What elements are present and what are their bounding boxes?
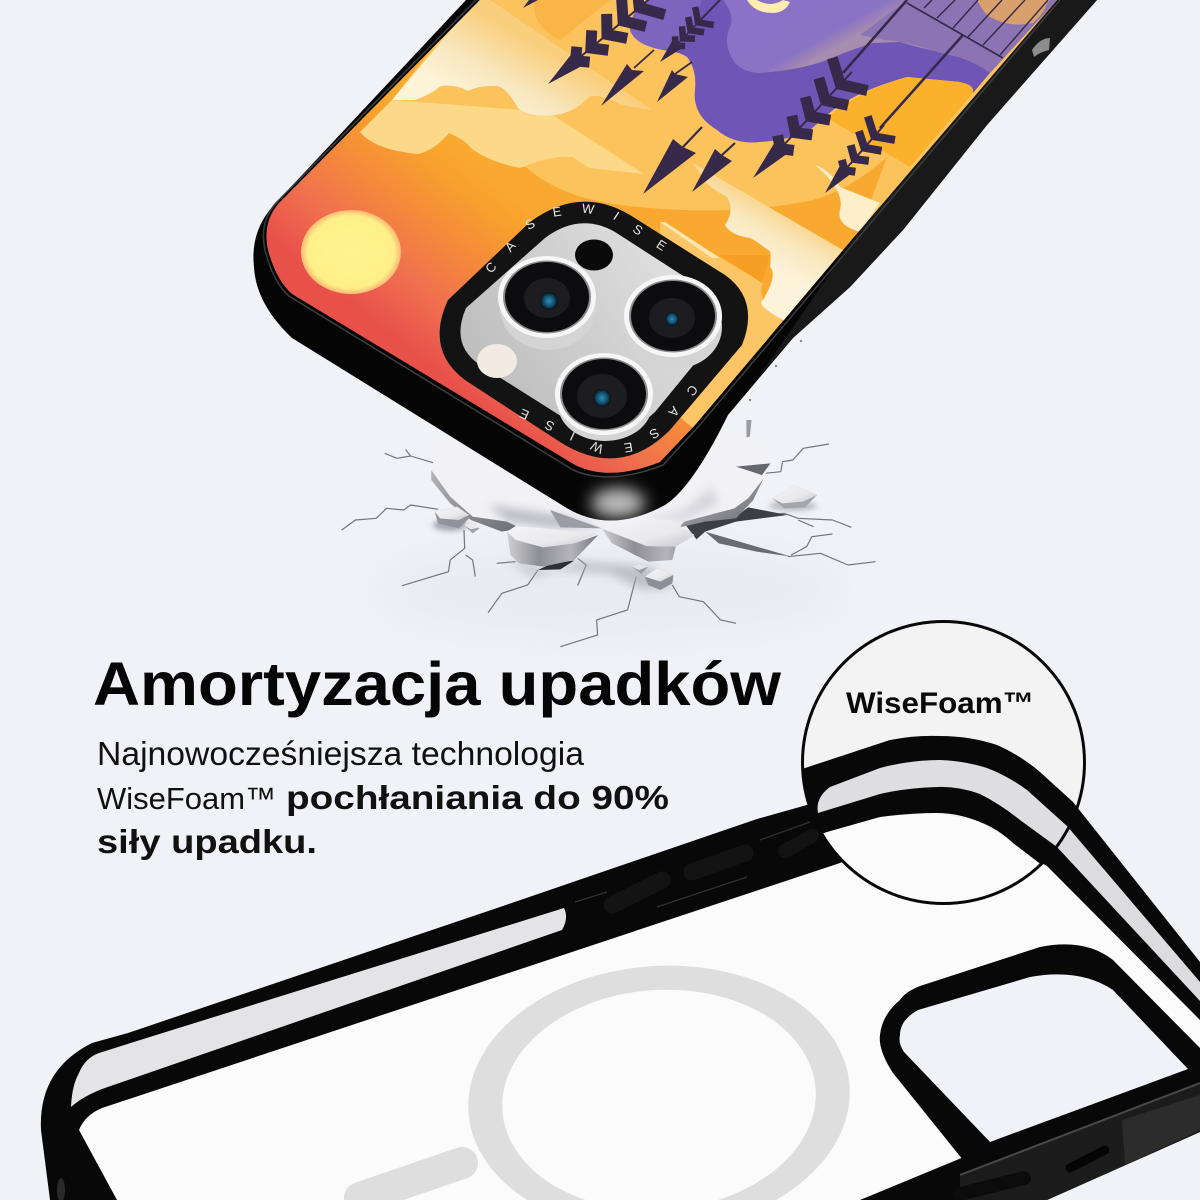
- orange wedge: [720, 255, 770, 283]
- shard B top: [602, 519, 695, 547]
- small shard 1: [435, 507, 469, 528]
- magnified frame: [804, 736, 1076, 864]
- title: Amortyzacja upadków: [93, 650, 782, 718]
- camera opening: [900, 974, 1188, 1142]
- right cream cloud: [693, 163, 843, 320]
- side button highlight: [1032, 38, 1050, 57]
- grey wedge under phone: [550, 510, 602, 528]
- shard B side: [602, 528, 695, 562]
- small shard 5: [645, 568, 673, 590]
- orange disc: [534, 0, 610, 40]
- left slab side: [431, 470, 521, 532]
- lens 1: [498, 256, 596, 350]
- cream cloud: [392, 0, 652, 116]
- arrow 2: [601, 50, 654, 106]
- arrow 3: [657, 62, 692, 102]
- small cream blob: [815, 165, 880, 232]
- arrow 5: [692, 143, 735, 192]
- magsafe ring: [459, 953, 859, 1200]
- purple cloud: [630, 0, 1057, 142]
- arrow 6: [753, 56, 869, 178]
- flash: [477, 344, 517, 378]
- screen artwork: [266, 0, 1057, 473]
- right slab side: [679, 478, 764, 527]
- clear case, bottom: [41, 790, 1200, 1200]
- lens 3: [555, 353, 653, 441]
- case body: [253, 0, 1097, 521]
- side button: [960, 1178, 1024, 1194]
- sun: [301, 210, 401, 294]
- magnified clear panel: [780, 813, 1100, 930]
- case frame: [41, 790, 1200, 1200]
- foam slot right: [1057, 826, 1200, 1001]
- upper slab: [431, 417, 770, 527]
- clear back panel: [79, 830, 1200, 1200]
- arrow 4: [643, 127, 702, 194]
- camera bumper: [440, 202, 748, 458]
- lens 2: [624, 275, 722, 369]
- hole left: [57, 1178, 65, 1200]
- dark wedge right: [736, 463, 770, 475]
- lighter purple overlay: [723, 0, 1057, 73]
- line 2 regular: WiseFoam™: [97, 781, 276, 816]
- dark gap left shard: [538, 561, 574, 570]
- camera plate: [460, 223, 722, 433]
- sky gradient: [266, 0, 1057, 473]
- moon: [747, 0, 790, 13]
- magnified foam slot: [818, 760, 1068, 846]
- line 1: Najnowocześniejsza technologia: [97, 735, 585, 772]
- bottom glossy highlight: [591, 488, 645, 518]
- arrows: [523, 0, 963, 205]
- volume button 1: [575, 877, 747, 907]
- bumper text upper: CASEWISE: [486, 204, 667, 272]
- small shard 3: [769, 485, 817, 511]
- small arrow top: [523, 0, 538, 8]
- rail lower face: [960, 1084, 1200, 1200]
- small shard 4: [632, 563, 648, 574]
- shard A side: [507, 532, 598, 567]
- phone with case, top: [253, 0, 1097, 520]
- magsafe alignment pill: [360, 1163, 462, 1198]
- magnified detail: [804, 736, 1076, 864]
- edge dots: [749, 340, 802, 401]
- mauve sky top right: [860, 0, 1057, 73]
- cream streak: [660, 222, 720, 258]
- light cloud band: [360, 100, 644, 174]
- arrow 6 shaft: [843, 0, 907, 73]
- moon glow top right: [977, 0, 1050, 25]
- crack wedge right: [705, 532, 791, 557]
- shadow under phone right: [643, 487, 719, 520]
- arrow 7 shaft: [880, 35, 963, 128]
- circle outline: [802, 622, 1084, 904]
- port button: [1070, 1150, 1105, 1168]
- line 3 bold: siły upadku.: [97, 823, 317, 860]
- dark gap right: [684, 507, 788, 539]
- arrow 3b: [660, 0, 722, 62]
- shadow under phone left: [488, 505, 602, 527]
- rail texture: [1122, 1095, 1200, 1165]
- right side band: [760, 0, 1097, 375]
- bumper text lower: CASEWISE: [519, 386, 697, 454]
- shard A top: [507, 526, 598, 547]
- action button: [760, 822, 812, 851]
- microphone hole: [575, 240, 613, 270]
- small shard 2: [464, 522, 479, 533]
- inner rim: [263, 0, 1060, 477]
- shadow under shards: [505, 560, 674, 590]
- line 2 bold: pochłaniania do 90%: [286, 779, 669, 816]
- volume button 2: [692, 853, 745, 872]
- label: WiseFoam: WiseFoam™: [846, 687, 1034, 720]
- magsafe ring inner: [495, 979, 823, 1200]
- body text: [97, 735, 669, 860]
- camera frame: [880, 944, 1200, 1160]
- magnifier circle: [801, 620, 1086, 905]
- foam slot left: [71, 908, 566, 1107]
- vertical wedge: [746, 420, 752, 437]
- rail highlight: [960, 1083, 1200, 1175]
- yellow upper field: [392, 0, 1057, 230]
- orange blob right: [827, 77, 973, 167]
- purple upper left lobe: [630, 0, 702, 50]
- arrow 7: [825, 115, 896, 193]
- cracked ground: [342, 417, 876, 647]
- shadow small shard left: [433, 519, 467, 531]
- tower grid: [907, 0, 1048, 58]
- lower yellow band: [660, 222, 783, 430]
- arrow 1: [548, 0, 666, 84]
